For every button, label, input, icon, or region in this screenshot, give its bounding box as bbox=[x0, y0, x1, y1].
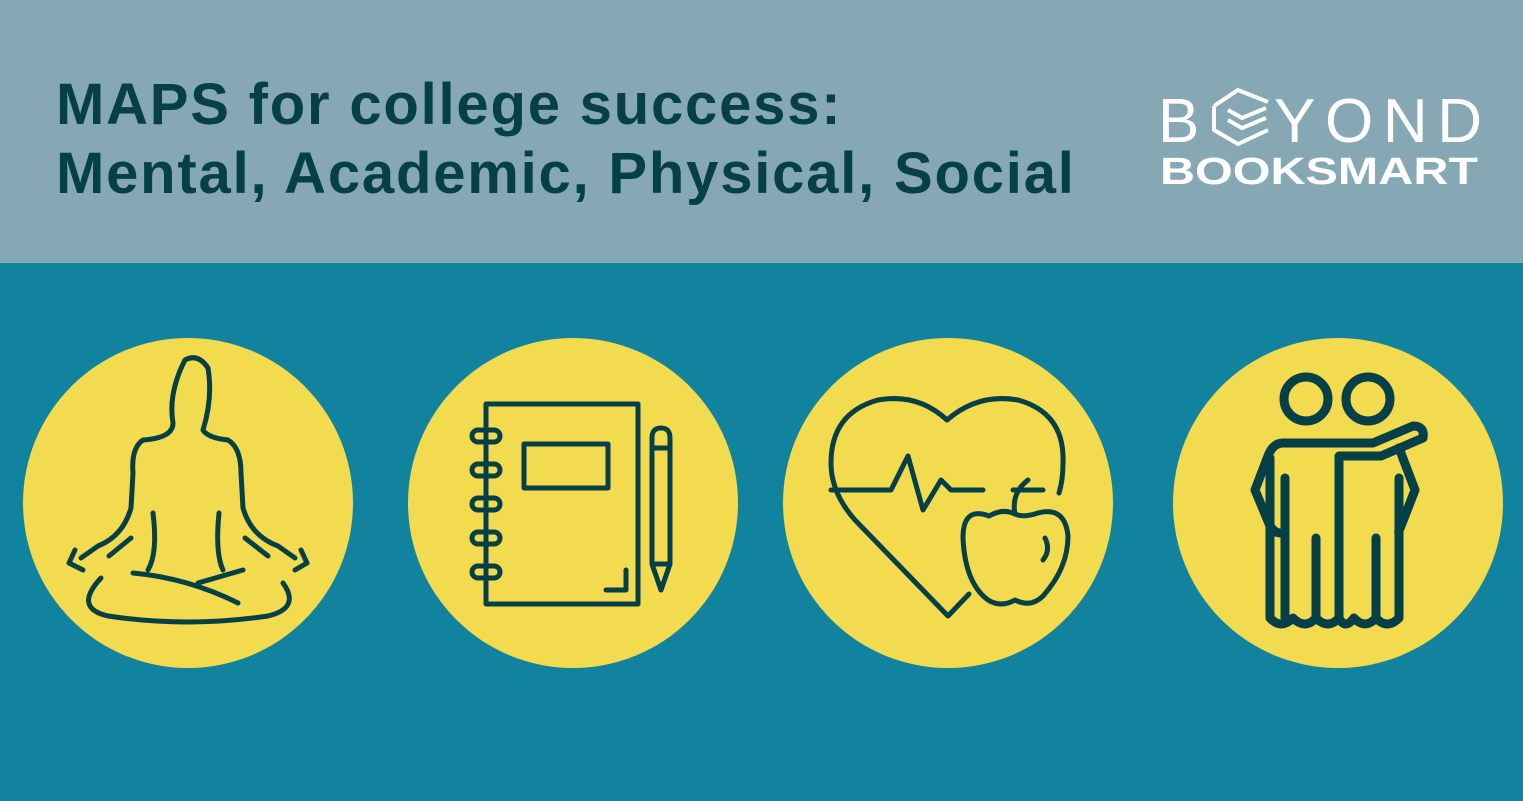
icon: meditation bbox=[23, 338, 353, 668]
icon: notebook bbox=[408, 338, 738, 668]
logo: B bbox=[1158, 87, 1199, 156]
logo: BOOKSMART bbox=[1160, 151, 1478, 193]
logo: YOND bbox=[1274, 87, 1482, 156]
title bbox=[56, 72, 1076, 206]
icon: two friends bbox=[1173, 338, 1503, 668]
title: Mental, Academic, Physical, Social bbox=[56, 141, 1076, 206]
header band bbox=[0, 0, 1523, 263]
logo bbox=[1158, 87, 1482, 193]
title: MAPS for college success: bbox=[56, 72, 842, 137]
icon: heart and apple bbox=[783, 338, 1113, 668]
